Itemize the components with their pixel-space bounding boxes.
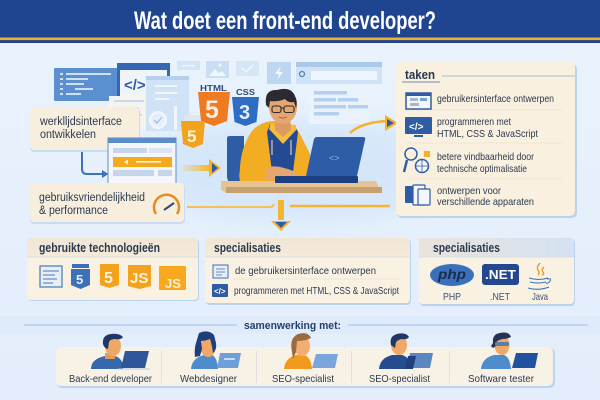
person: Software tester — [481, 332, 538, 369]
icon: code: </> — [214, 287, 226, 296]
panel: samenwerking — [56, 331, 555, 388]
person: SEO-specialist — [284, 333, 338, 369]
heading: gebruikte technologieën — [39, 241, 160, 255]
callout: werkelijk interface — [30, 107, 140, 152]
icon: CSS3 shield — [232, 88, 259, 126]
callout: gebruiksvriendelijkheid: & performance — [39, 205, 108, 217]
title banner — [0, 0, 600, 43]
person: SEO-specialist 2 — [379, 333, 433, 369]
icon: .NET — [482, 264, 519, 285]
hand — [262, 166, 298, 180]
icon: code monitor — [405, 117, 432, 137]
icon: code — [212, 284, 228, 297]
hoodie — [240, 121, 310, 181]
chair — [227, 136, 244, 182]
person: Back-end developer — [91, 334, 150, 369]
panel: taken: technische optimalisatie — [437, 163, 527, 175]
panel: taken: ontwerpen voor — [437, 185, 501, 197]
icon: interface — [406, 93, 431, 109]
panel: taken: verschillende apparaten — [437, 196, 534, 208]
label: SEO-specialist — [272, 373, 334, 385]
label: Back-end developer — [69, 373, 152, 385]
label: Software tester — [468, 373, 534, 385]
icon: JS shield: JS — [130, 270, 148, 287]
panel: specialisaties midden — [205, 238, 411, 305]
desk — [221, 181, 382, 193]
icon: list — [213, 265, 228, 278]
icon: HTML shield — [100, 264, 119, 288]
illustration: developer at laptop: <> — [329, 153, 340, 163]
panel: taken — [396, 62, 577, 218]
icon: .NET: .NET — [485, 268, 516, 282]
arrow: blue connector — [82, 152, 108, 178]
illustration: developer at laptop — [221, 89, 382, 193]
panel: gebruikte technologieën — [27, 238, 199, 301]
label: Webdesigner — [180, 373, 237, 385]
icon: HTML5 large shield: HTML — [200, 84, 227, 93]
icon: HTML5 large shield — [198, 84, 230, 126]
arrow: down — [271, 200, 291, 231]
panel: taken: programmeren met — [437, 116, 511, 128]
panel: specialisaties back-end — [419, 238, 575, 306]
illustration: floating UI windows: </> — [124, 77, 146, 94]
arrow: to developer — [180, 159, 221, 177]
connector lines — [187, 204, 390, 207]
icon: CSS3 shield: CSS — [236, 88, 256, 97]
icon: HTML5 large shield: 5 — [205, 96, 219, 124]
icon: editor — [40, 266, 62, 287]
callout: werkelijk interface: ontwikkelen — [40, 129, 96, 141]
heading: specialisaties — [433, 241, 500, 255]
icon: gauge — [154, 195, 179, 214]
icon: CSS shield: 5 — [76, 272, 83, 287]
heading: specialisaties — [214, 241, 281, 255]
illustration: floating UI windows — [54, 61, 382, 131]
icon: code monitor: </> — [409, 122, 424, 133]
title: Wat doet een front-end developer? — [134, 7, 436, 35]
icon: JS square: JS — [165, 276, 181, 291]
arrow: curved to taken — [350, 115, 398, 133]
icon: HTML5 small shield: 5 — [187, 127, 196, 146]
icon: devices — [405, 185, 430, 205]
panel: taken: HTML, CSS & JavaScript — [437, 128, 538, 140]
icon: JS square — [159, 266, 186, 291]
laptop — [275, 176, 358, 183]
icon: CSS shield — [71, 264, 90, 289]
icon: Java — [528, 263, 551, 289]
icon: CSS3 shield: 3 — [239, 102, 250, 124]
panel: taken: gebruikersinterface ontwerpen — [437, 93, 554, 105]
heading: taken: taken — [405, 67, 435, 82]
callout: werkelijk interface: werklljdsinterface — [39, 116, 122, 128]
head — [275, 118, 291, 137]
panel: specialisaties midden: de gebruikersinterface ontwerpen — [235, 265, 376, 277]
label: SEO-specialist — [369, 373, 430, 385]
icon: HTML shield: 5 — [104, 270, 113, 287]
icon: HTML5 small shield — [181, 115, 205, 148]
panel: specialisaties back-end: Java — [532, 291, 548, 303]
icon: search globe — [404, 148, 430, 173]
icon: php — [430, 264, 474, 286]
icon: php: php — [437, 266, 466, 282]
illustration: browser window — [108, 138, 176, 184]
panel: taken: betere vindbaarheid door — [437, 151, 534, 163]
panel: specialisaties midden: programmeren met HTML, CSS & JavaScript — [234, 285, 399, 297]
callout: gebruiksvriendelijkheid: gebruiksvriendelijkheid — [39, 192, 145, 204]
heading: samenwerking met: samenwerking met: — [244, 320, 341, 332]
panel: specialisaties back-end: PHP — [443, 291, 461, 303]
icon: JS shield — [128, 265, 151, 289]
person: Webdesigner — [191, 331, 241, 369]
panel: specialisaties back-end: .NET — [490, 291, 510, 303]
callout: gebruiksvriendelijkheid — [30, 183, 185, 224]
